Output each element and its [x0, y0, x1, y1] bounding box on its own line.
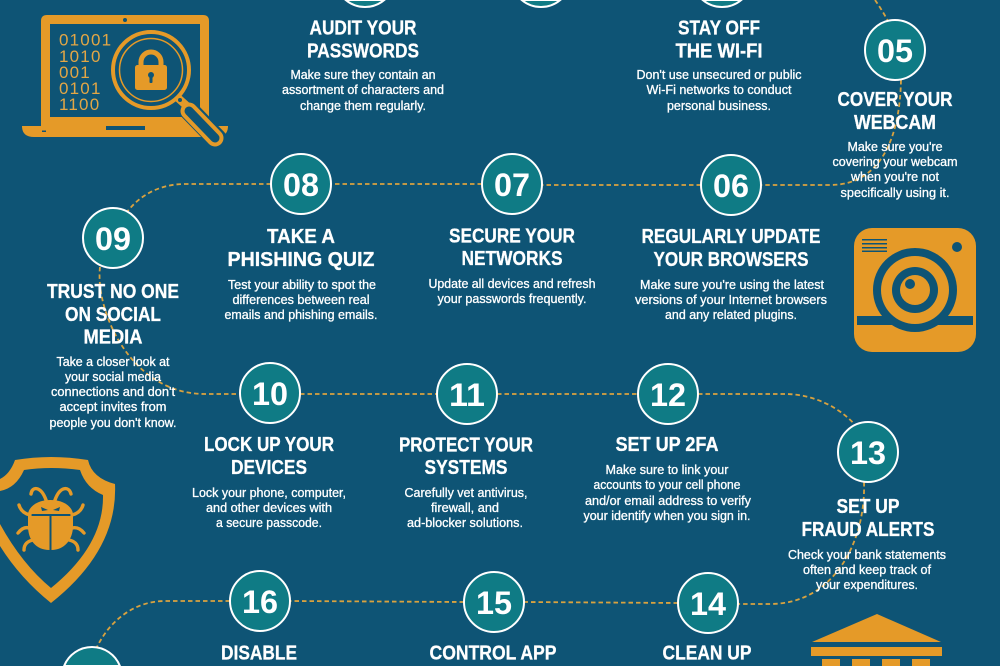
tip 15: control app: 15 [476, 585, 512, 621]
tip 05: cover your webcam: Make sure you're [848, 140, 943, 154]
tip 06: regularly update your browsers: Make sure you're using the latest [640, 278, 825, 292]
icon: laptop with padlock under magnifier: 01001 [59, 30, 112, 50]
tip 08: take a phishing quiz: differences between real [232, 293, 370, 307]
tip 08: take a phishing quiz: PHISHING QUIZ [228, 248, 374, 271]
tip 05: cover your webcam: WEBCAM [854, 111, 936, 134]
tip 12: set up 2fa [584, 364, 752, 523]
tip 09: trust no one on social media [47, 208, 179, 430]
tip 06: regularly update your browsers: 06 [713, 168, 749, 204]
tip 11: protect your systems: firewall, and [431, 501, 499, 515]
tip 07: secure your networks: NETWORKS [462, 247, 562, 270]
tip 13: set up fraud alerts: 13 [850, 435, 886, 471]
tip 12: set up 2fa: Make sure to link your [606, 463, 728, 477]
tip 10: lock up your devices: Lock your phone, computer, [192, 486, 346, 500]
tip 06: regularly update your browsers: and any related plugins. [665, 308, 797, 322]
tip 09: trust no one on social media: 09 [95, 221, 131, 257]
tip 15: control app: CONTROL APP [430, 642, 556, 664]
tip 11: protect your systems: Carefully vet antivirus, [404, 486, 528, 500]
tip 12: set up 2fa: your identify when you sign in. [584, 509, 750, 523]
tip 13: set up fraud alerts: Check your bank statements [788, 548, 946, 562]
tip 06: regularly update your browsers: versions of your Internet browsers [635, 293, 827, 307]
tip: audit your passwords: PASSWORDS [307, 40, 419, 62]
tip 09: trust no one on social media: your social media [65, 370, 161, 384]
tip 16: disable: 16 [242, 584, 278, 620]
tip 05: cover your webcam: covering your webcam [832, 155, 958, 169]
tip 07: secure your networks: SECURE YOUR [449, 224, 575, 248]
tip 11: protect your systems: PROTECT YOUR [399, 434, 533, 456]
tip 07: secure your networks: Update all devices and refresh [428, 277, 596, 291]
tip 08: take a phishing quiz: Test your ability to spot the [228, 278, 376, 292]
tip 10: lock up your devices: LOCK UP YOUR [204, 433, 334, 456]
tip: audit your passwords: AUDIT YOUR [310, 16, 417, 40]
tip 16: disable [221, 571, 297, 664]
tip 09: trust no one on social media: MEDIA [84, 326, 143, 348]
tip 10: lock up your devices: DEVICES [231, 456, 307, 479]
tip 10: lock up your devices: 10 [252, 376, 288, 412]
tip 13: set up fraud alerts [788, 422, 946, 592]
tip 15: control app [430, 572, 556, 664]
tip 14: clean up [662, 573, 752, 664]
tip: stay off the wi-fi: STAY OFF [678, 16, 760, 40]
icon: laptop with padlock under magnifier: 001 [59, 63, 91, 82]
dashed connector path [97, 0, 901, 647]
tip 06: regularly update your browsers [635, 155, 827, 322]
icon: laptop with padlock under magnifier: 1100 [59, 95, 100, 114]
tip 13: set up fraud alerts: FRAUD ALERTS [802, 518, 934, 541]
tip 10: lock up your devices: and other devices with [206, 501, 332, 515]
tip 09: trust no one on social media: connections and don't [51, 385, 176, 399]
tip 11: protect your systems: ad-blocker solutions. [407, 516, 523, 530]
tip 07: secure your networks: your passwords frequently. [438, 292, 586, 306]
tip 08: take a phishing quiz [224, 154, 378, 322]
tip 09: trust no one on social media: Take a closer look at [56, 355, 170, 369]
tip 05: cover your webcam: specifically using it. [840, 186, 950, 200]
tip: stay off the wi-fi: personal business. [667, 99, 771, 113]
tip 08: take a phishing quiz: 08 [283, 167, 319, 203]
tip: stay off the wi-fi: Wi-Fi networks to conduct [646, 83, 792, 97]
tip 05: cover your webcam [832, 20, 958, 200]
icon: bank building [811, 614, 942, 666]
tip 12: set up 2fa: SET UP 2FA [616, 433, 719, 456]
tip 16: disable: DISABLE [221, 642, 297, 664]
tip: audit your passwords: assortment of characters and [282, 83, 444, 97]
tip 13: set up fraud alerts: SET UP [836, 495, 900, 518]
tip 13: set up fraud alerts: often and keep track of [803, 563, 932, 577]
tip: stay off the wi-fi: Don't use unsecured or public [636, 68, 802, 82]
tip 13: set up fraud alerts: your expenditures. [816, 578, 918, 592]
step 1: visible edge of number circle [346, 0, 384, 7]
tip 05: cover your webcam: 05 [877, 33, 913, 69]
tip 11: protect your systems: SYSTEMS [424, 456, 508, 479]
tip 09: trust no one on social media: TRUST NO ONE [47, 280, 179, 303]
tip 12: set up 2fa: and/or email address to verify [585, 494, 752, 508]
tip 12: set up 2fa: accounts to your cell phone [594, 478, 741, 492]
tip: audit your passwords [282, 16, 444, 113]
icon: laptop with padlock under magnifier [22, 15, 228, 139]
tip 11: protect your systems [399, 364, 533, 530]
step 2: visible edge of number circle [522, 0, 560, 7]
tip: stay off the wi-fi: THE WI-FI [676, 40, 762, 62]
tip 05: cover your webcam: COVER YOUR [838, 88, 953, 111]
tip 08: take a phishing quiz: TAKE A [267, 225, 335, 248]
tip 10: lock up your devices [192, 363, 346, 530]
tip: audit your passwords: Make sure they contain an [290, 68, 436, 82]
tip 11: protect your systems: 11 [449, 377, 485, 413]
tip 07: secure your networks: 07 [494, 167, 530, 203]
tip 14: clean up: CLEAN UP [662, 642, 752, 664]
tip 06: regularly update your browsers: YOUR BROWSERS [654, 248, 808, 271]
tip 07: secure your networks [428, 154, 596, 306]
tip 09: trust no one on social media: people you don't know. [50, 416, 176, 430]
tip 10: lock up your devices: a secure passcode. [216, 516, 322, 530]
tip 09: trust no one on social media: ON SOCIAL [65, 303, 161, 326]
tip 17: number circle, clipped by the bottom edge [64, 647, 120, 666]
tip 12: set up 2fa: 12 [650, 377, 686, 413]
icon: webcam [854, 228, 976, 352]
tip: stay off the wi-fi [636, 16, 802, 113]
icon: shield with bug [0, 457, 115, 603]
icon: laptop with padlock under magnifier: 1010 [59, 47, 102, 66]
tip 06: regularly update your browsers: REGULARLY UPDATE [642, 225, 820, 248]
icon: laptop with padlock under magnifier: 0101 [59, 79, 102, 98]
tip: audit your passwords: change them regularly. [300, 99, 426, 113]
tip 14: clean up: 14 [690, 586, 726, 622]
tip 08: take a phishing quiz: emails and phishing emails. [224, 308, 378, 322]
step 3: visible edge of number circle [703, 0, 741, 7]
tip 05: cover your webcam: when you're not [850, 170, 940, 184]
tip 09: trust no one on social media: accept invites from [60, 400, 166, 414]
